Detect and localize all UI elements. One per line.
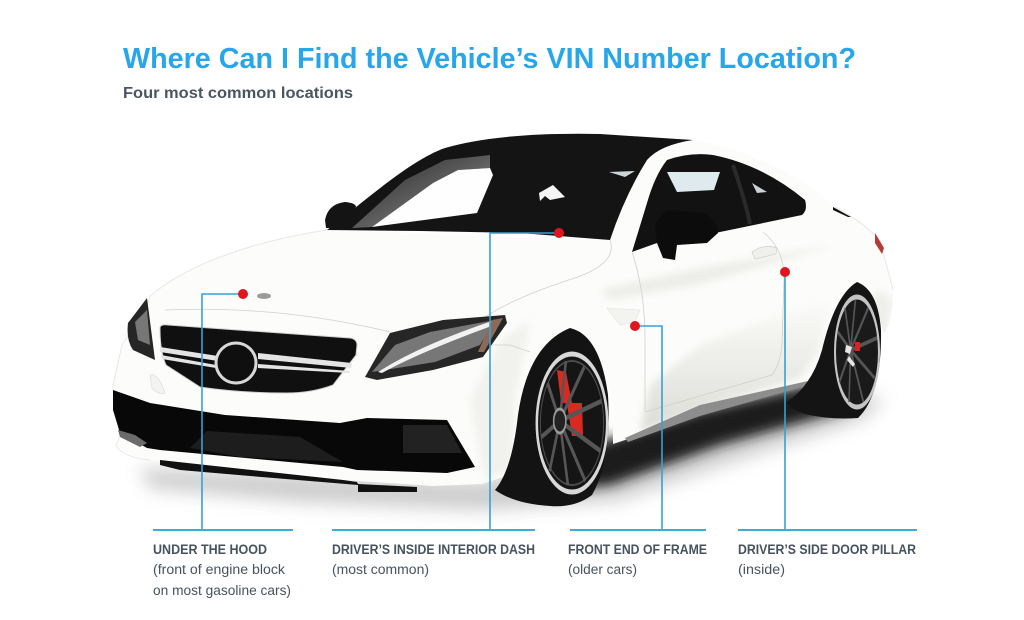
- subtitle: Four most common locations: [123, 85, 353, 102]
- interior glare: [609, 171, 635, 177]
- hood ornament: [257, 293, 271, 299]
- lower air intake: [113, 390, 475, 473]
- right intake mesh: [403, 425, 462, 453]
- rear light: [875, 233, 884, 254]
- side skirt trim: [625, 381, 812, 442]
- callout: interior dash: [332, 228, 564, 577]
- grille emblem: [216, 343, 256, 383]
- deck spoiler: [833, 207, 851, 217]
- windshield glass reflection: [372, 168, 493, 227]
- label: (inside): [738, 562, 785, 577]
- rear quarter glass: [752, 183, 767, 193]
- rule: [332, 529, 535, 531]
- label: DRIVER’S SIDE DOOR PILLAR: [738, 542, 916, 557]
- right headlight: [365, 315, 507, 380]
- callout: door pillar: [738, 267, 917, 577]
- b-pillar divider: [733, 165, 750, 224]
- car body: [113, 140, 893, 486]
- connector line: [784, 272, 786, 530]
- lip trim: [118, 430, 147, 447]
- side window: [632, 154, 806, 252]
- location dot: [630, 321, 640, 331]
- ground shadow: [140, 385, 885, 510]
- a-pillar reflection: [352, 155, 490, 228]
- label: UNDER THE HOOD: [153, 542, 267, 557]
- fender vent: [607, 308, 640, 325]
- label: DRIVER’S INSIDE INTERIOR DASH: [332, 542, 535, 557]
- rear window panel: [667, 172, 720, 192]
- label: (older cars): [568, 562, 637, 577]
- rear wheel: [787, 282, 881, 418]
- label: (most common): [332, 562, 429, 577]
- callout: under the hood: [153, 289, 293, 598]
- rule: [153, 529, 293, 531]
- callout: front end of frame: [568, 321, 707, 577]
- left headlight chrome: [135, 310, 150, 345]
- location dot: [554, 228, 564, 238]
- fog lamp cap: [150, 374, 165, 393]
- left headlight: [128, 298, 155, 360]
- connector line: [202, 294, 243, 530]
- label: [568, 542, 707, 577]
- car illustration: [113, 134, 893, 510]
- grille: [160, 325, 357, 393]
- rule: [570, 529, 706, 531]
- panel lines: [165, 232, 828, 412]
- location dot: [780, 267, 790, 277]
- title: Where Can I Find the Vehicle’s VIN Number Location?: [123, 43, 856, 75]
- door handle: [752, 246, 777, 259]
- label: FRONT END OF FRAME: [568, 542, 707, 557]
- label: on most gasoline cars): [153, 583, 291, 598]
- lower intake mesh: [190, 431, 343, 462]
- label: [332, 542, 535, 577]
- dash reflection: [539, 185, 565, 201]
- label: [738, 542, 916, 577]
- chrome grille bars: [160, 347, 352, 373]
- location dot: [238, 289, 248, 299]
- body outline: [113, 207, 893, 460]
- connector line: [490, 233, 559, 530]
- front wheel: [495, 328, 609, 506]
- rule: [738, 529, 917, 531]
- windshield and roof: [327, 134, 693, 240]
- door and fender shading: [470, 245, 893, 480]
- label: (front of engine block: [153, 562, 285, 577]
- splitter: [160, 460, 417, 492]
- connector line: [635, 326, 662, 530]
- label: [153, 542, 291, 598]
- right mirror: [655, 210, 718, 260]
- left mirror: [325, 202, 356, 228]
